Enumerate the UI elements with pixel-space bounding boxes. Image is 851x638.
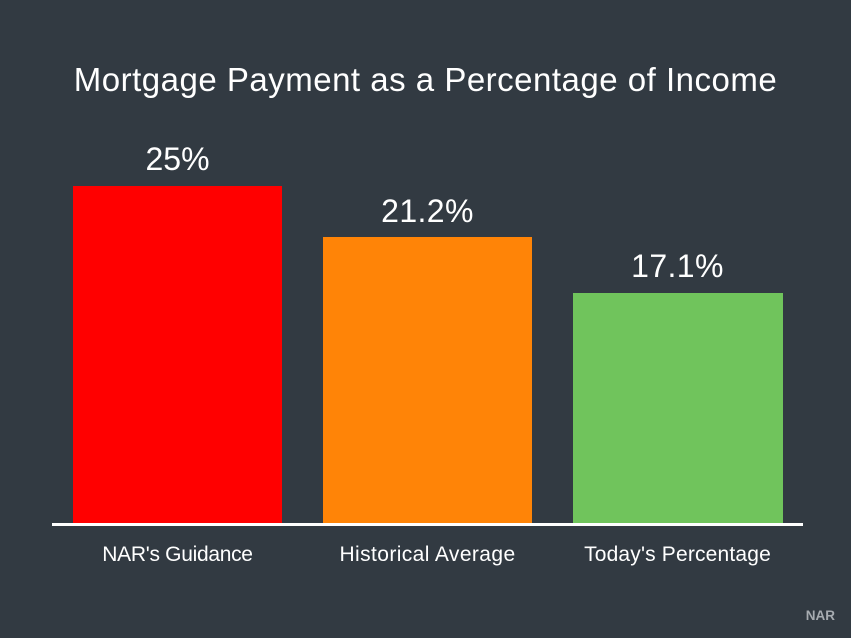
bar: NAR's Guidance xyxy=(73,186,282,523)
title: Mortgage Payment as a Percentage of Income xyxy=(74,61,777,98)
bar: Today's Percentage xyxy=(573,293,783,523)
bar: Historical Average xyxy=(323,237,532,523)
axis label: NAR's Guidance: NAR's Guidance xyxy=(102,543,253,566)
value label: Today's Percentage: 17.1% xyxy=(631,248,724,284)
source: NAR: NAR xyxy=(806,608,835,623)
value label: NAR's Guidance: 25% xyxy=(145,141,210,177)
axis line xyxy=(52,523,803,526)
axis label: Historical Average: Historical Average xyxy=(339,543,516,566)
axis label: Today's Percentage: Today's Percentage xyxy=(584,543,771,566)
value label: Historical Average: 21.2% xyxy=(381,193,474,229)
